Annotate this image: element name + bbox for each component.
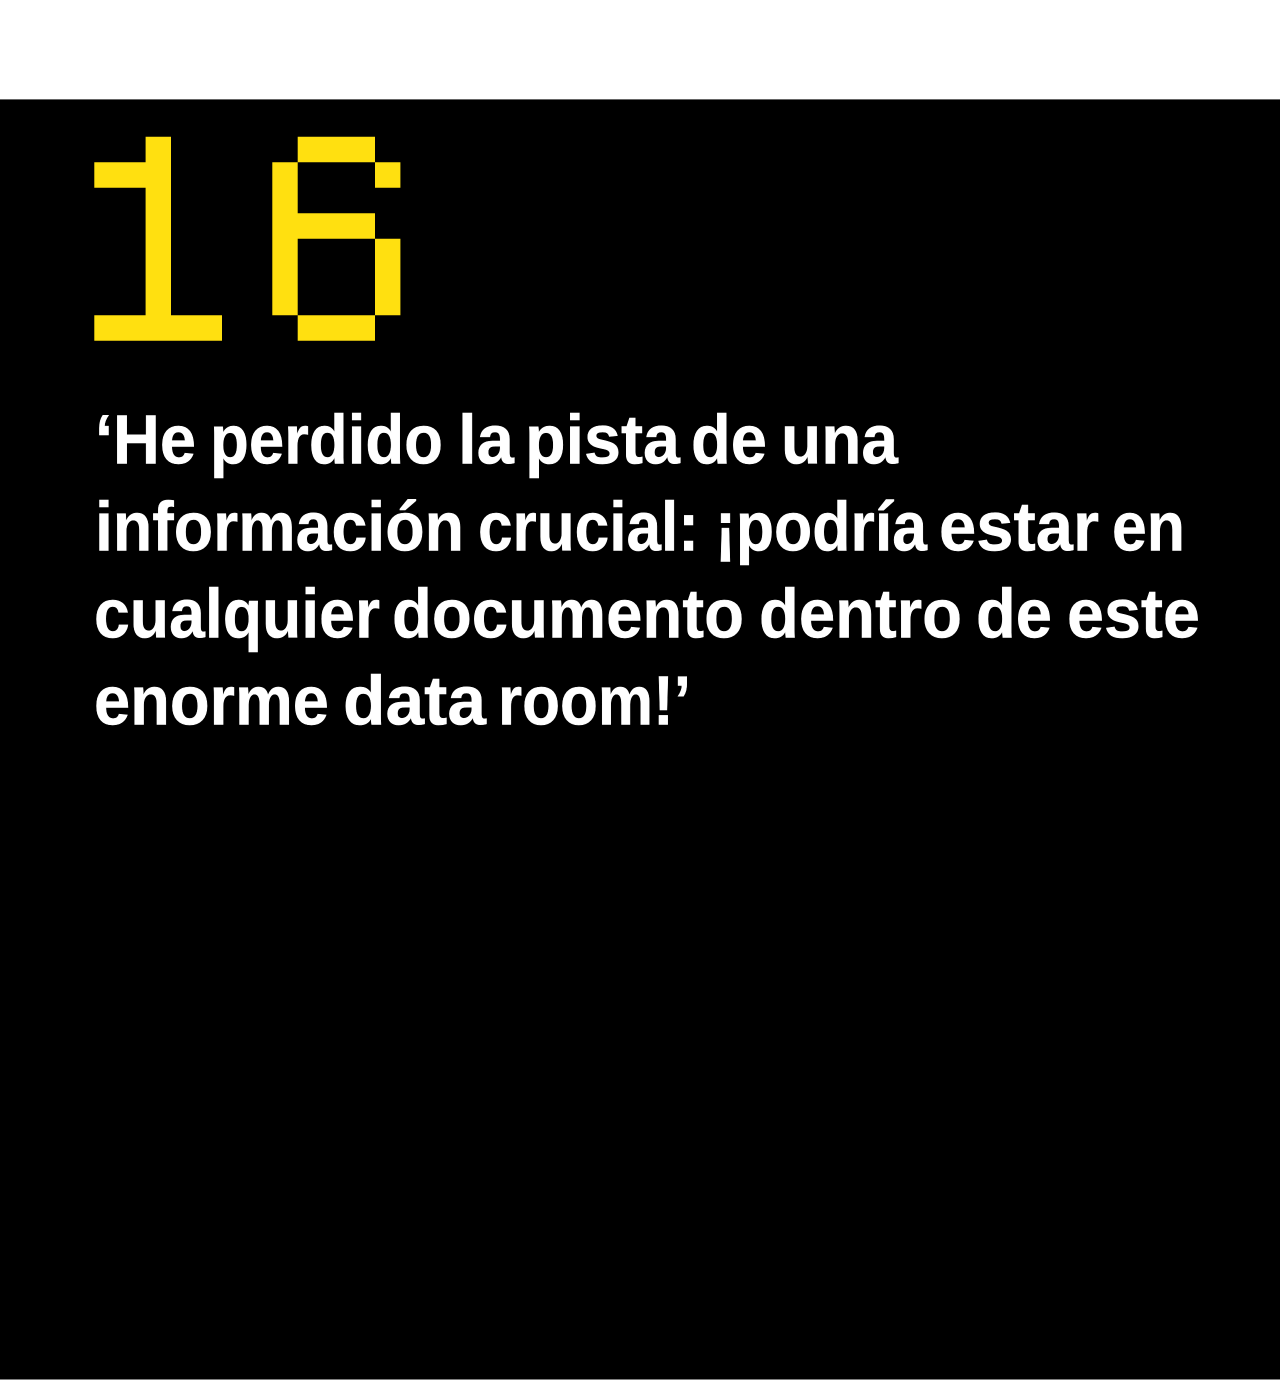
quote line 4: enorme — [94, 662, 329, 740]
text block: quote — [94, 400, 1200, 740]
quote line 4: room!’ — [498, 662, 691, 740]
quote line 1: la — [458, 400, 515, 478]
quote line 2: ¡podría — [715, 488, 928, 566]
quote line 1: ‘He — [95, 400, 196, 478]
quote line 3: cualquier — [94, 574, 380, 652]
quote line 2: crucial: — [478, 488, 699, 566]
quote line 2: en — [1112, 488, 1185, 566]
pixel digit 1 — [94, 137, 222, 341]
quote line 1 — [95, 400, 899, 478]
quote line 3: dentro — [759, 574, 962, 652]
heading: pixel number 16 — [94, 137, 400, 341]
quote line 1: pista — [525, 400, 681, 478]
quote line 3 — [94, 574, 1200, 652]
quote line 3: este — [1067, 574, 1200, 652]
quote line 1: perdido — [210, 400, 443, 478]
pixel digit 6 — [272, 137, 400, 341]
quote line 1: una — [781, 400, 899, 478]
quote line 2: estar — [939, 488, 1099, 566]
quote line 3: documento — [392, 574, 744, 652]
quote line 2: información — [95, 488, 464, 566]
quote line 4: data — [343, 662, 487, 740]
quote line 3: de — [976, 574, 1052, 652]
quote line 4 — [94, 662, 691, 740]
quote line 2 — [95, 488, 1185, 566]
quote line 1: de — [691, 400, 767, 478]
